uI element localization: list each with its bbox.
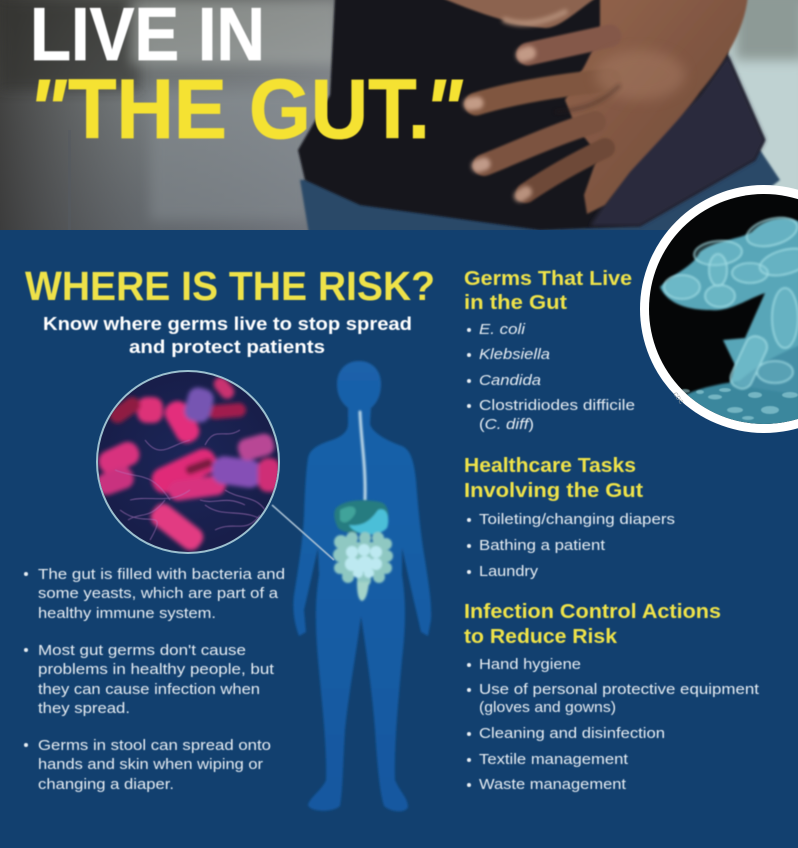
top finger (528, 36, 610, 54)
heading: to Reduce Risk (464, 625, 618, 648)
action list: Use of personal protective equipment (479, 682, 759, 698)
photo circle: gut bacteria micrograph: CDC (671, 392, 684, 406)
germ list: Klebsiella (479, 347, 550, 363)
action list (467, 657, 759, 793)
connector line from germ circle to gut (272, 505, 334, 560)
action list: Textile management (479, 752, 628, 768)
human body silhouette (293, 361, 431, 811)
section heading: WHERE IS THE RISK? (25, 263, 435, 309)
ring finger (526, 148, 605, 193)
headline: THE GUT. (68, 62, 430, 156)
digestive organs (333, 500, 393, 601)
task list: Bathing a patient (479, 538, 605, 554)
fact 2 (24, 643, 274, 717)
photo: person holding stomach (0, 0, 798, 240)
esophagus (360, 412, 365, 500)
fact 2: problems in healthy people, but (38, 662, 274, 678)
task list: Toileting/changing diapers (479, 512, 675, 528)
left column: facts about the gut (24, 567, 285, 793)
fact 2: Most gut germs don't cause (38, 643, 246, 659)
task list (467, 512, 675, 580)
heading: Infection Control Actions (464, 600, 721, 623)
action list: Cleaning and disinfection (479, 726, 665, 742)
fact 1: The gut is filled with bacteria and (38, 567, 285, 583)
right column: germs that live in the gut (464, 267, 635, 433)
task list: Laundry (479, 564, 539, 580)
photo circle: gut bacteria micrograph (640, 185, 798, 440)
germ list: Clostridiodes difficile (479, 398, 635, 414)
fact 3 (24, 738, 271, 793)
germ list: (C. diff ) (479, 417, 534, 433)
action list: (gloves and gowns) (479, 700, 616, 716)
heading (464, 454, 643, 502)
photo circle: pink bacteria (93, 371, 280, 554)
heading: Involving the Gut (464, 479, 643, 502)
heading: Germs That Live (464, 267, 632, 290)
subheading: and protect patients (129, 337, 325, 357)
middle finger (484, 122, 595, 165)
germ list: E. coli (479, 322, 526, 338)
heading (464, 267, 632, 314)
germ list: Candida (479, 373, 541, 389)
headline (28, 0, 463, 156)
fact 3: hands and skin when wiping or (38, 757, 263, 773)
fact 3: Germs in stool can spread onto (38, 738, 271, 754)
fact 2: they can cause infection when (38, 682, 260, 698)
right column: healthcare tasks (464, 454, 675, 580)
heading (464, 600, 721, 648)
action list: Waste management (479, 777, 626, 793)
fact 1: some yeasts, which are part of a (38, 586, 279, 602)
heading: Healthcare Tasks (464, 454, 636, 477)
index finger (476, 80, 610, 104)
headline: " (28, 62, 67, 156)
fact 1 (24, 567, 285, 622)
right column: infection control actions (464, 600, 759, 793)
fact 2: they spread. (38, 701, 130, 717)
heading: in the Gut (464, 291, 567, 314)
subheading: Know where germs live to stop spread (43, 314, 412, 334)
fact 1: healthy immune system. (38, 606, 216, 622)
subheading (43, 314, 412, 357)
large intestine (333, 532, 393, 587)
action list: Hand hygiene (479, 657, 581, 673)
headline: " (424, 62, 463, 156)
germ list (467, 322, 635, 433)
fact 3: changing a diaper. (38, 777, 174, 793)
